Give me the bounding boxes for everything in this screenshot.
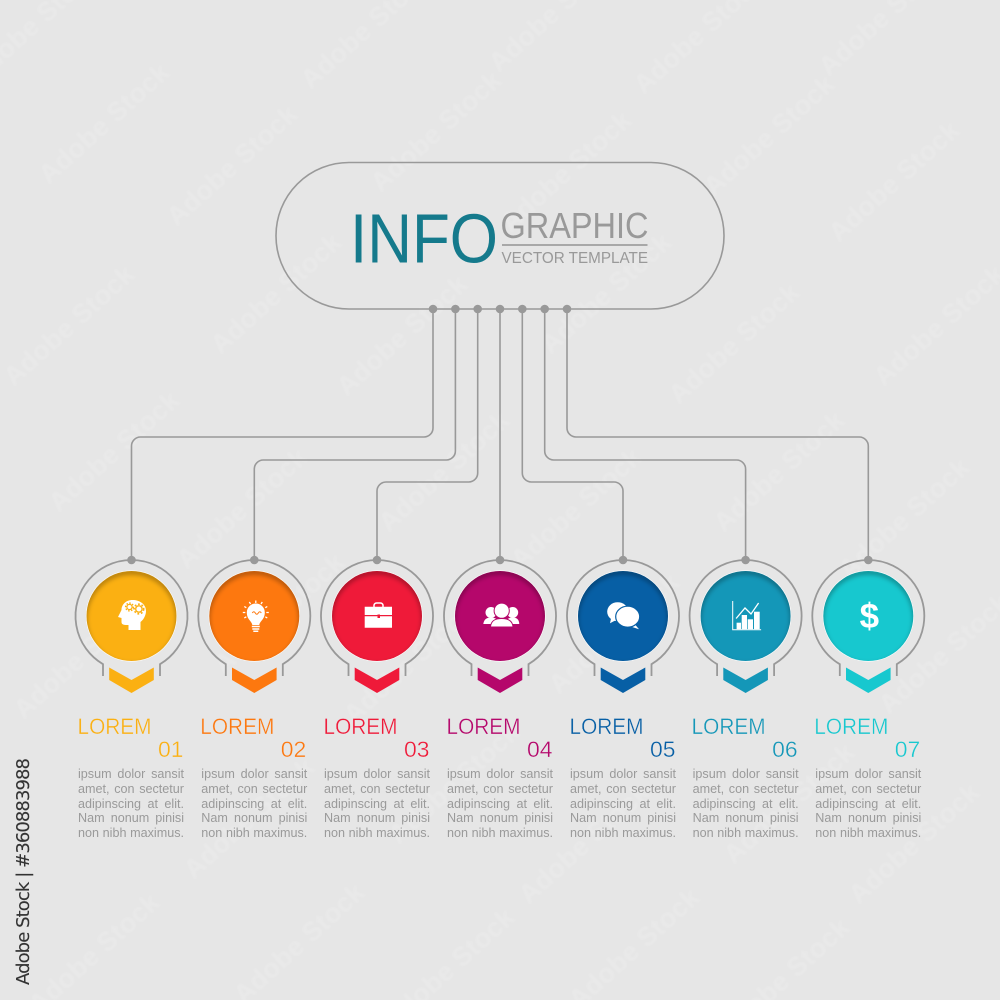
stock watermark: Adobe Stock [823,114,966,248]
title: INFO: INFO [350,200,498,278]
title: GRAPHIC: GRAPHIC [500,205,648,246]
icon: briefcase [365,603,392,628]
stock watermark: Adobe Stock [33,56,176,190]
body text 04: ipsum dolor sansit [447,767,553,781]
label 06: LOREM [692,714,766,739]
body text 06: ipsum dolor sansit [693,767,799,781]
stock watermark: Adobe Stock [338,596,481,730]
body text 02: Nam nonum pinisi [201,811,307,825]
stock id side text: Adobe Stock | #360883988 [13,758,34,985]
body text 04: Nam nonum pinisi [447,811,553,825]
body text 02 [201,767,307,845]
body text 03: non nibh maximus. [324,826,430,840]
number 03: 03 [404,737,430,762]
icon: speech bubbles [607,602,640,629]
header pill with title [276,162,724,309]
stock watermark: Adobe Stock [698,68,841,202]
stock watermark: Adobe Stock [495,104,638,238]
stock watermark: Adobe Stock [0,258,141,392]
label 05: LOREM [570,714,644,739]
label 01: LOREM [78,714,152,739]
body text 06: adipinscing at elit. [693,797,799,811]
body text 01 [78,767,184,845]
stock watermark: Adobe Stock [373,404,516,538]
icon: dollar sign: $ [860,597,879,636]
body text 06 [693,767,799,845]
stock watermark: Adobe Stock [383,716,526,850]
stock watermark: Adobe Stock [8,591,151,725]
item 07 [812,556,924,845]
body text 07: adipinscing at elit. [815,797,921,811]
body text 03: adipinscing at elit. [324,797,430,811]
stock watermark: Adobe Stock [535,226,678,360]
chevron 05 [601,668,645,693]
number 07: 07 [895,737,920,762]
stock watermark: Adobe Stock [543,566,686,700]
chevron 06 [723,668,768,693]
body text 04 [447,767,553,845]
stock watermark: Adobe Stock [331,268,474,402]
icon: bar chart with trend line [733,601,761,630]
label 04: LOREM [446,714,520,739]
subtitle: VECTOR TEMPLATE: VECTOR TEMPLATE [502,250,648,267]
stock watermark: Adobe Stock [513,776,656,910]
label 02: LOREM [200,714,274,739]
number 05: 05 [650,737,676,762]
body text 07 [815,767,921,845]
number 02: 02 [281,737,306,762]
body text 07: Nam nonum pinisi [815,811,921,825]
item 03 [321,556,433,845]
body text 04: adipinscing at elit. [447,797,553,811]
item 05 [567,556,679,845]
connector lines [132,309,868,560]
body text 02: adipinscing at elit. [201,797,307,811]
body text 06: non nibh maximus. [693,826,799,840]
body text 05: adipinscing at elit. [570,797,676,811]
body text 07: ipsum dolor sansit [815,767,921,781]
stock watermark: Adobe Stock [833,451,976,585]
body text 05: non nibh maximus. [570,826,676,840]
body text 05: Nam nonum pinisi [570,811,676,825]
body text 02: non nibh maximus. [201,826,307,840]
body text 07: non nibh maximus. [815,826,921,840]
body text 05 [570,767,676,845]
connector dots on pill [429,305,571,313]
label 07: LOREM [814,714,888,739]
chevron 03 [355,668,399,693]
body text 06: Nam nonum pinisi [693,811,799,825]
body text 05: ipsum dolor sansit [570,767,676,781]
body text 04: non nibh maximus. [447,826,553,840]
stock watermark: Adobe Stock [43,384,186,518]
body text 02: ipsum dolor sansit [201,767,307,781]
body text 01: ipsum dolor sansit [78,767,184,781]
stock watermark: Adobe Stock [708,404,851,538]
body text 01: amet, con sectetur [78,782,184,796]
stock watermark: Adobe Stock [505,441,648,575]
body text 03: amet, con sectetur [324,782,430,796]
chevron 07 [846,668,891,693]
item 04 [444,556,556,845]
label 03: LOREM [324,714,398,739]
body text 03: Nam nonum pinisi [324,811,430,825]
body text 02: amet, con sectetur [201,782,307,796]
body text 03: ipsum dolor sansit [324,767,430,781]
stock watermark: Adobe Stock [365,64,508,198]
stock watermark: Adobe Stock [205,226,348,360]
body text 07: amet, con sectetur [815,782,921,796]
stock watermark: Adobe Stock [718,736,861,870]
body text 06: amet, con sectetur [693,782,799,796]
stock watermark: Adobe Stock [171,441,314,575]
chevron 02 [232,668,277,693]
chevron 01 [109,668,154,693]
icon: head with gears [118,600,146,630]
stock watermark: Adobe Stock [208,546,351,680]
body text 04: amet, con sectetur [447,782,553,796]
item 01 [76,556,188,845]
item 06 [690,556,802,845]
number 04: 04 [527,737,552,762]
body text 05: amet, con sectetur [570,782,676,796]
stock watermark: Adobe Stock [663,276,806,410]
stock watermark: Adobe Stock [843,776,986,910]
body text 01: non nibh maximus. [78,826,184,840]
stock watermark: Adobe Stock [161,98,304,232]
icon: light bulb [243,600,269,631]
body text 03 [324,767,430,845]
chevron 04 [478,668,522,693]
icon: group of people [483,603,519,627]
item 02 [198,556,310,845]
stock watermark: Adobe Stock [178,751,321,885]
body text 01: adipinscing at elit. [78,797,184,811]
number 01: 01 [158,737,184,762]
number 06: 06 [772,737,798,762]
body text 01: Nam nonum pinisi [78,811,184,825]
